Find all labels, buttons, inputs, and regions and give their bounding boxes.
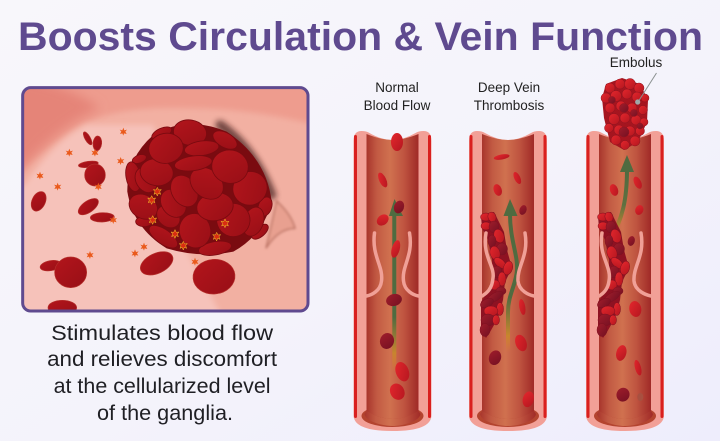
photo scene: [24, 89, 306, 310]
embolus leader line: [635, 73, 656, 105]
caption text: Stimulates blood flow: [51, 322, 274, 345]
valves: [599, 233, 651, 296]
clot: [596, 211, 631, 338]
arrow: [504, 199, 518, 352]
label: deep vein thrombosis: Thrombosis: [474, 98, 545, 113]
valves: [366, 233, 418, 296]
vein: embolus: [586, 131, 664, 431]
label: normal blood flow: Normal: [375, 80, 419, 95]
label: normal blood flow: Blood Flow: [364, 98, 431, 113]
caption text: and relieves discomfort: [47, 348, 277, 371]
title: Boosts Circulation & Vein Function: [18, 15, 703, 59]
photo border: [23, 88, 308, 311]
embolus clot: [601, 78, 649, 150]
blood cells: [608, 175, 645, 404]
clot platelets: [148, 187, 229, 250]
loose cells: [28, 131, 236, 315]
platelets: [36, 128, 199, 266]
blood cells: [375, 133, 412, 403]
label: embolus: Embolus: [610, 55, 663, 70]
clot underlay: [127, 124, 272, 254]
valves: [482, 233, 534, 296]
label: deep vein thrombosis: Deep Vein: [478, 80, 540, 95]
arrow: [389, 199, 403, 372]
clot cells: [124, 117, 275, 258]
clot: [479, 211, 514, 338]
vein: normal blood flow: [354, 131, 432, 431]
blood cells: [487, 153, 536, 408]
vein: deep vein thrombosis: [469, 131, 547, 431]
arrow: [611, 155, 634, 238]
caption text: at the cellularized level: [54, 375, 271, 398]
caption text: of the ganglia.: [97, 402, 233, 425]
panel: blood clot photo: [21, 86, 310, 312]
